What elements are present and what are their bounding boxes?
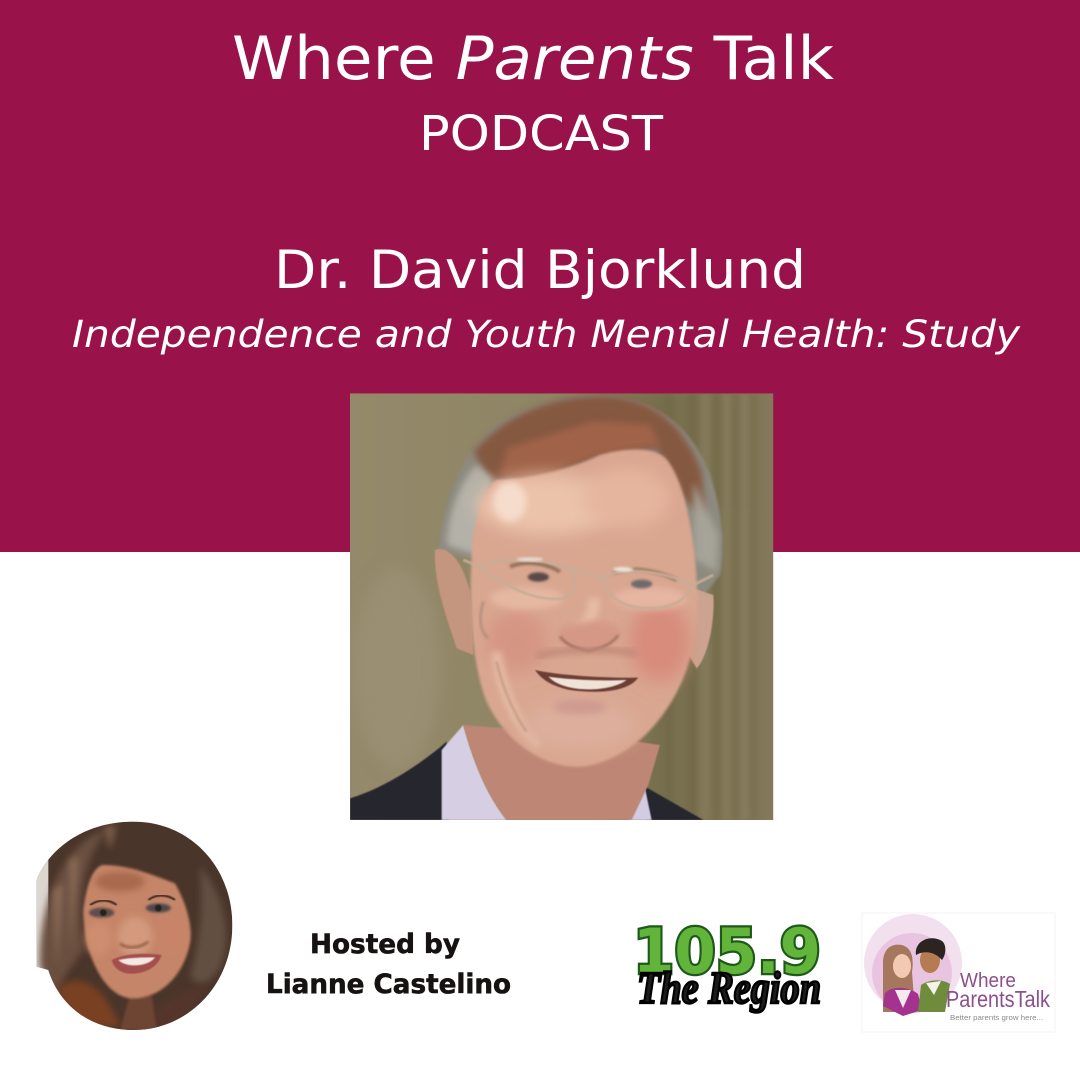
logo script: Where: Where [960, 970, 1016, 992]
host portrait: Lianne Castelino [33, 820, 237, 1033]
background: crimson header panel [0, 0, 1080, 552]
logo illustration: two parents in pink circle [864, 914, 962, 1016]
label: Hosted by: Hosted by [310, 929, 460, 960]
host credit text [266, 929, 511, 1000]
subtitle: PODCAST: PODCAST [419, 106, 664, 162]
logo wordmark: The Region [637, 962, 821, 1013]
guest portrait photo [350, 393, 773, 820]
guest name: Dr. David Bjorklund [274, 240, 806, 301]
logo tagline: Better parents grow here... [950, 1013, 1043, 1022]
logo: 105.9 The Region [633, 915, 821, 1013]
logo frame [862, 913, 1055, 1032]
title: Where Parents Talk: Where Parents Talk [232, 24, 834, 94]
logo numerals: 105.9 [633, 915, 821, 988]
logo: Where Parents Talk [862, 913, 1055, 1032]
host name: Lianne Castelino [266, 969, 511, 1000]
episode topic: Independence and Youth Mental Health: Study [72, 313, 1021, 356]
logo script: ParentsTalk: ParentsTalk [946, 986, 1050, 1012]
